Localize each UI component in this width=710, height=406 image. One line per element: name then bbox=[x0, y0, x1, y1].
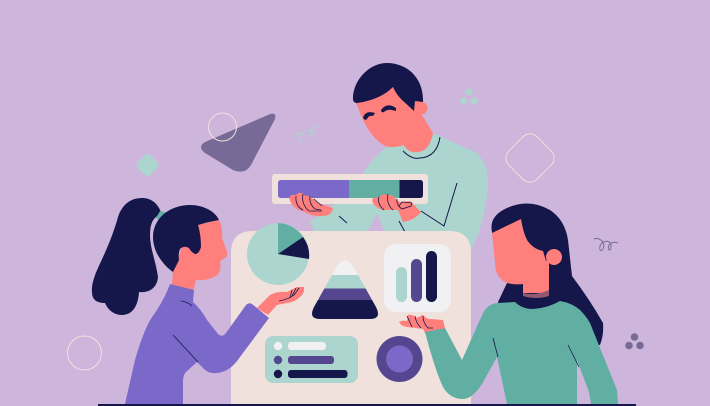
pie chart bbox=[247, 223, 309, 285]
man collar line bbox=[403, 137, 440, 158]
right woman sweater bbox=[425, 301, 618, 404]
left woman face and neck bbox=[172, 220, 227, 292]
person: man at top bbox=[310, 63, 488, 250]
man hair bbox=[353, 63, 423, 111]
pie wedge navy bbox=[278, 237, 309, 259]
progress bar card bbox=[272, 174, 428, 204]
legend row 1 bbox=[274, 342, 326, 350]
right woman hand bbox=[399, 315, 445, 334]
person: woman on left bbox=[92, 198, 304, 404]
left woman hair bbox=[153, 205, 219, 272]
right woman sweater lines bbox=[493, 338, 579, 367]
bar chart bars bbox=[396, 251, 437, 302]
stacked bar bbox=[278, 180, 423, 198]
donut chart bbox=[376, 336, 422, 382]
right woman face bbox=[492, 219, 549, 293]
man sweater lines bbox=[339, 183, 457, 232]
right woman collar lines bbox=[523, 298, 550, 306]
bar chart card bbox=[384, 244, 451, 312]
person: woman on right bbox=[399, 219, 618, 404]
legend row 3 bbox=[274, 370, 348, 378]
decoration: purple squiggle bbox=[594, 239, 618, 251]
decoration: left outline circle bbox=[68, 336, 102, 370]
right woman collar bbox=[515, 293, 560, 310]
decoration: mint squiggle bbox=[294, 125, 318, 142]
man eyes bbox=[363, 105, 396, 120]
man left hand bbox=[289, 193, 333, 216]
woman right hair back bbox=[491, 204, 603, 345]
ground line bbox=[98, 404, 636, 406]
man neck and face bbox=[356, 87, 433, 152]
table panel bbox=[231, 231, 471, 404]
decoration: purple rounded triangle bbox=[201, 114, 275, 172]
decoration: small outline circle bbox=[208, 113, 236, 141]
man sweater bbox=[310, 133, 488, 250]
illustration: team discussing data charts bbox=[67, 63, 644, 406]
pie wedge teal bbox=[278, 223, 303, 254]
right woman neck shadow bbox=[523, 290, 549, 298]
decoration: purple dots bbox=[625, 333, 644, 349]
left woman sweater lines bbox=[173, 301, 198, 362]
left woman hand bbox=[257, 287, 304, 315]
left woman sweater bbox=[125, 284, 269, 404]
man ear bbox=[414, 102, 428, 114]
ponytail band bbox=[156, 211, 168, 222]
legend card bbox=[265, 336, 358, 383]
decoration: outline rounded diamond bbox=[502, 130, 558, 186]
decoration: mint diamond bbox=[135, 152, 160, 178]
ponytail bbox=[92, 198, 161, 315]
legend row 2 bbox=[274, 356, 334, 364]
right woman ear bbox=[546, 249, 562, 265]
decoration: mint dots bbox=[460, 88, 478, 105]
pyramid chart bbox=[312, 260, 378, 319]
man right hand bbox=[372, 194, 421, 222]
